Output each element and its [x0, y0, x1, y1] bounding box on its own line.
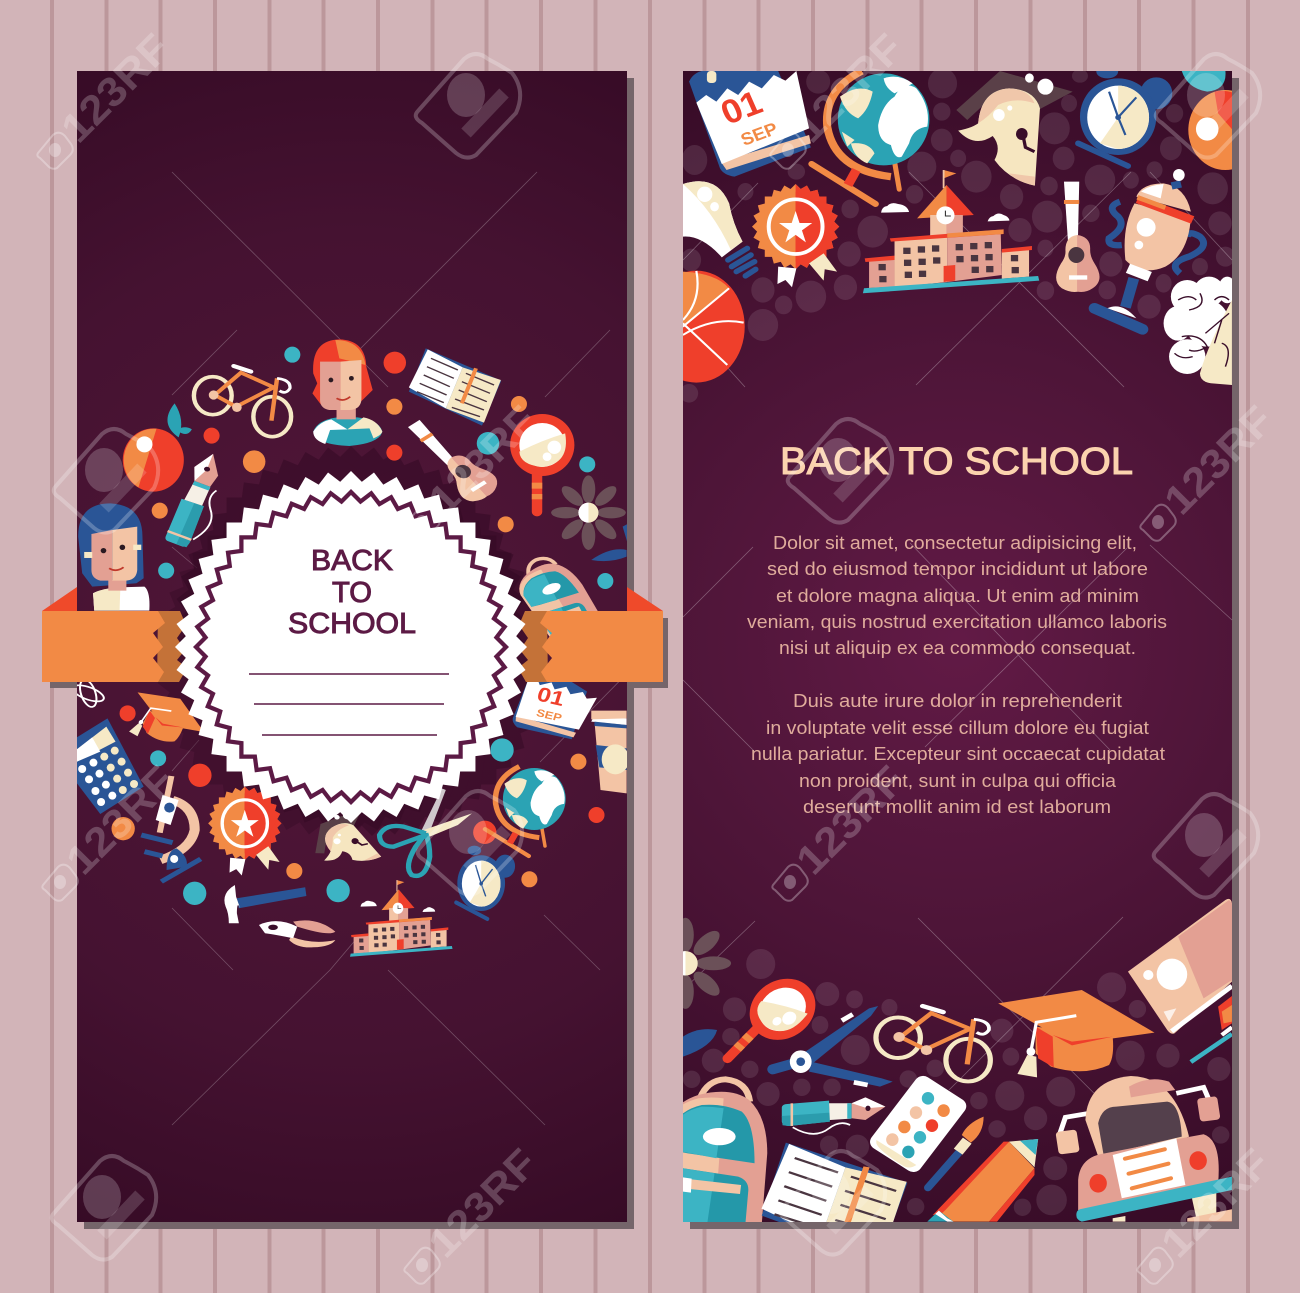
- right card paragraph two: [751, 690, 1165, 817]
- icon: orange fruit: [1182, 71, 1232, 170]
- right card paragraph one: nisi ut aliquip ex ea commodo consequat.: [779, 637, 1136, 658]
- right card paragraph two: Duis aute irure dolor in reprehenderit: [793, 690, 1122, 711]
- icon: bicycle: [194, 366, 291, 437]
- icon: microscope: [141, 776, 201, 882]
- icon: daisy flower: [640, 918, 731, 1057]
- background bubbles top: [680, 68, 1235, 403]
- icon: tablet notebook: [1128, 899, 1232, 1062]
- icon: hammer: [224, 885, 306, 923]
- icon: paint palette: [867, 1073, 970, 1175]
- icon: girl with red hair: [312, 339, 382, 446]
- badge heading: [288, 545, 416, 640]
- icon: magnifying glass: [510, 414, 574, 512]
- icon: basketball: [648, 271, 745, 383]
- icon: pencil: [927, 1139, 1038, 1222]
- icon: light bulb: [683, 181, 756, 276]
- icon: compass dividers: [773, 1006, 893, 1087]
- icon: calendar: [512, 682, 597, 740]
- icon: fountain pen: [165, 454, 218, 548]
- icon: guitar: [408, 420, 498, 502]
- icon: rosette medal: [208, 786, 282, 876]
- right card paragraph one: sed do eiusmod tempor incididunt ut labore: [767, 558, 1148, 579]
- icon: bicycle: [876, 1006, 990, 1081]
- right card paragraph one: Dolor sit amet, consectetur adipisicing elit,: [773, 532, 1137, 553]
- icon: atom: [77, 682, 105, 708]
- icon: calculator: [77, 718, 144, 814]
- icon: globe: [812, 71, 929, 204]
- icon: fountain pen: [782, 1097, 885, 1134]
- icon: guitar: [1056, 182, 1100, 292]
- left card: upper ring of icons: [78, 339, 629, 643]
- icon: school bus: [1055, 1076, 1232, 1222]
- icon: globe: [485, 766, 566, 856]
- icon: calendar: [689, 71, 811, 177]
- right card paragraph two: nulla pariatur. Excepteur sint occaecat cupidatat: [751, 743, 1165, 764]
- icon: school building: [863, 170, 1039, 293]
- icon: backpack: [519, 556, 598, 636]
- badge heading: TO: [332, 577, 372, 609]
- right card paragraph one: et dolore magna aliqua. Ut enim ad minim: [776, 585, 1139, 606]
- badge heading: BACK: [311, 545, 394, 577]
- right card paragraph two: in voluptate velit esse cillum dolore eu fugiat: [766, 717, 1149, 738]
- icon: helmet: [956, 71, 1073, 186]
- panel: left card: [42, 71, 668, 1229]
- icon: helmet: [315, 814, 382, 861]
- icon: orange fruit: [123, 403, 192, 492]
- right card paragraph one: veniam, quis nostrud exercitation ullamco laboris: [747, 611, 1167, 632]
- icon: coloured dots upper: [152, 347, 613, 589]
- icon: graduation cap: [129, 692, 201, 742]
- icon: paint brush: [928, 1117, 984, 1188]
- right card: bottom icon cluster: [640, 899, 1232, 1271]
- right card: top icon cluster: [683, 71, 1232, 402]
- icon: daisy flower: [551, 475, 629, 561]
- icon: open book: [409, 348, 501, 426]
- icon: girl with blue hair: [78, 503, 149, 611]
- icon: magnifying glass: [708, 966, 829, 1080]
- icon: scissors: [380, 788, 472, 876]
- icon: rosette medal: [752, 184, 840, 288]
- background bubbles bottom: [683, 949, 1230, 1216]
- icon: brain: [1164, 277, 1236, 385]
- right card heading: BACK TO SCHOOL: [780, 441, 1133, 483]
- icon: open book: [759, 1130, 910, 1271]
- panel: right card: [683, 71, 1239, 1229]
- icon: coffee cup: [591, 711, 629, 793]
- icon: alarm clock: [1078, 65, 1172, 166]
- right card paragraph one: [747, 532, 1167, 658]
- left card: lower ring of icons: [70, 661, 629, 957]
- icon: alarm clock: [456, 846, 515, 919]
- badge heading: SCHOOL: [288, 608, 416, 640]
- badge: zigzag white label: [102, 398, 600, 896]
- badge blank writing lines: [249, 674, 449, 735]
- right card paragraph two: non proident, sunt in culpa qui officia: [799, 770, 1117, 791]
- icon: school building: [350, 880, 453, 957]
- ribbon with zigzag ends: [42, 587, 668, 688]
- right card paragraph two: deserunt mollit anim id est laborum: [803, 796, 1111, 817]
- icon: trophy cup: [1095, 169, 1204, 329]
- icon: backpack: [669, 1079, 767, 1223]
- icon: pliers: [259, 920, 335, 947]
- icon: graduation cap: [998, 990, 1154, 1077]
- icon: coloured dots lower: [112, 705, 605, 905]
